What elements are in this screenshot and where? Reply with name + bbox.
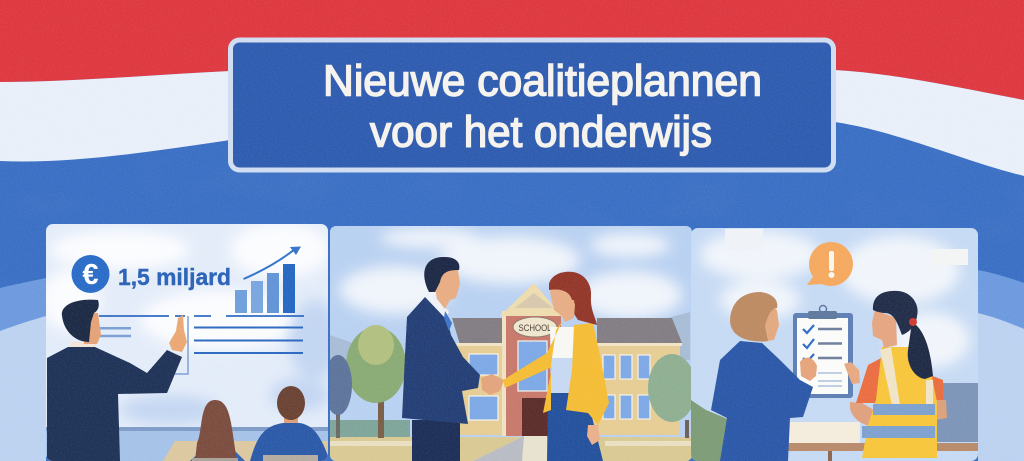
building back right bbox=[936, 383, 978, 442]
handshake bbox=[481, 374, 504, 395]
worker in safety vest bbox=[844, 291, 947, 458]
amount label: 1,5 miljard bbox=[118, 264, 231, 290]
table bbox=[785, 422, 978, 461]
ground bbox=[330, 437, 692, 461]
chart: rising bars with arrow bbox=[235, 246, 301, 313]
door bbox=[522, 398, 548, 436]
icon: alert speech bubble bbox=[807, 242, 853, 286]
path to the door bbox=[473, 436, 550, 461]
student with short hair bbox=[250, 386, 330, 461]
panel: handshake in front of school bbox=[324, 226, 696, 461]
tree left bbox=[346, 325, 406, 438]
school sign: SCHOOL bbox=[518, 323, 552, 334]
shrub bbox=[691, 400, 730, 461]
title line 1: Nieuwe coalitieplannen bbox=[323, 56, 762, 106]
woman with bob haircut bbox=[711, 292, 817, 461]
panel: budget presentation in classroom bbox=[40, 222, 341, 461]
icon: euro coin: € bbox=[82, 259, 99, 291]
clipboard checklist bbox=[793, 306, 853, 398]
presenter in dark suit bbox=[47, 300, 187, 461]
desk bbox=[163, 441, 328, 461]
student with long hair bbox=[190, 400, 245, 461]
text lines on the board bbox=[99, 316, 304, 374]
title line 2: voor het onderwijs bbox=[370, 108, 712, 156]
tree right bbox=[648, 354, 691, 438]
tree far left bbox=[330, 355, 352, 438]
school sign bbox=[513, 317, 557, 337]
panel: review with checklist bbox=[691, 228, 978, 461]
floor strip bbox=[46, 431, 328, 461]
hedge bbox=[330, 420, 410, 437]
woman in yellow cardigan bbox=[503, 272, 609, 461]
school building bbox=[452, 283, 682, 436]
icon: euro coin bbox=[72, 255, 110, 293]
man in suit bbox=[402, 257, 480, 461]
windows bbox=[469, 341, 650, 420]
title banner bbox=[230, 40, 834, 170]
distant hills bbox=[330, 312, 690, 360]
